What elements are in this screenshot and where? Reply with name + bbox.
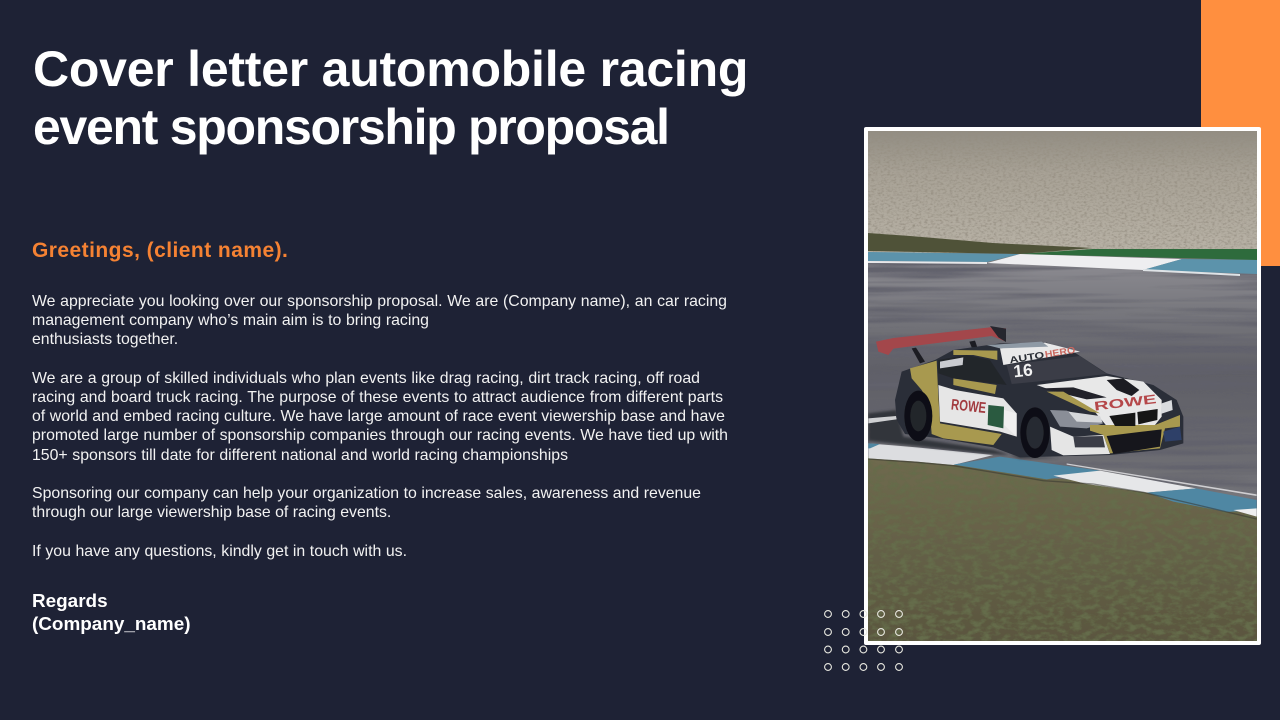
photo: racing car on track bbox=[868, 131, 1257, 641]
car livery lettering: HERO bbox=[1044, 345, 1076, 360]
car livery lettering: ROWE bbox=[950, 396, 987, 417]
text block: letter body: We appreciate you looking over our sponsorship proposal. We are (Company name), an car racing bbox=[32, 293, 727, 310]
track surface bbox=[868, 258, 1257, 530]
title bbox=[33, 41, 748, 155]
decorative dot grid bbox=[824, 610, 903, 671]
racing car bbox=[868, 326, 1183, 458]
rear wing bbox=[876, 326, 1006, 363]
title: event sponsorship proposal bbox=[33, 99, 669, 155]
sign-off: (Company_name) bbox=[32, 614, 191, 635]
car livery lettering: AUTO bbox=[1009, 350, 1045, 365]
car body bbox=[895, 343, 1183, 457]
text block: letter body: of world and embed racing culture. We have large amount of race event viewership base and have bbox=[32, 408, 725, 425]
orange corner block bbox=[1201, 0, 1280, 266]
trackside verge and upper kerb bbox=[868, 233, 1257, 276]
text block: letter body: We are a group of skilled individuals who plan events like drag racing, dirt track racing, off road bbox=[32, 370, 700, 387]
text block: letter body: management company who’s main aim is to bring racing bbox=[32, 312, 429, 329]
text block: letter body: through our large viewership base of racing events. bbox=[32, 504, 391, 521]
rear wheel bbox=[904, 391, 932, 441]
sign-off bbox=[32, 591, 191, 635]
greeting heading: Greetings, (client name). bbox=[32, 239, 288, 262]
title: Cover letter automobile racing bbox=[33, 41, 748, 97]
lower kerb bbox=[868, 443, 1257, 519]
gravel trap bbox=[868, 131, 1257, 253]
car livery lettering bbox=[950, 345, 1157, 417]
text block: letter body: promoted large number of sponsorship companies through our racing events. We have tied up with bbox=[32, 427, 728, 444]
grass foreground bbox=[868, 456, 1257, 641]
text block: letter body: Sponsoring our company can help your organization to increase sales, awareness and revenue bbox=[32, 485, 701, 502]
text block: letter body: enthusiasts together. bbox=[32, 331, 178, 348]
car livery lettering: 16 bbox=[1012, 359, 1034, 381]
text block: letter body: 150+ sponsors till date for different national and world racing championships bbox=[32, 447, 568, 464]
sign-off: Regards bbox=[32, 591, 108, 612]
text block: letter body: If you have any questions, kindly get in touch with us. bbox=[32, 543, 407, 560]
front wheel bbox=[1020, 407, 1050, 458]
text block: letter body: racing and board truck racing. The purpose of these events to attract audience from different parts bbox=[32, 389, 723, 406]
photo frame bbox=[864, 127, 1261, 645]
text block: letter body bbox=[32, 293, 728, 560]
car livery lettering: ROWE bbox=[1093, 392, 1157, 414]
